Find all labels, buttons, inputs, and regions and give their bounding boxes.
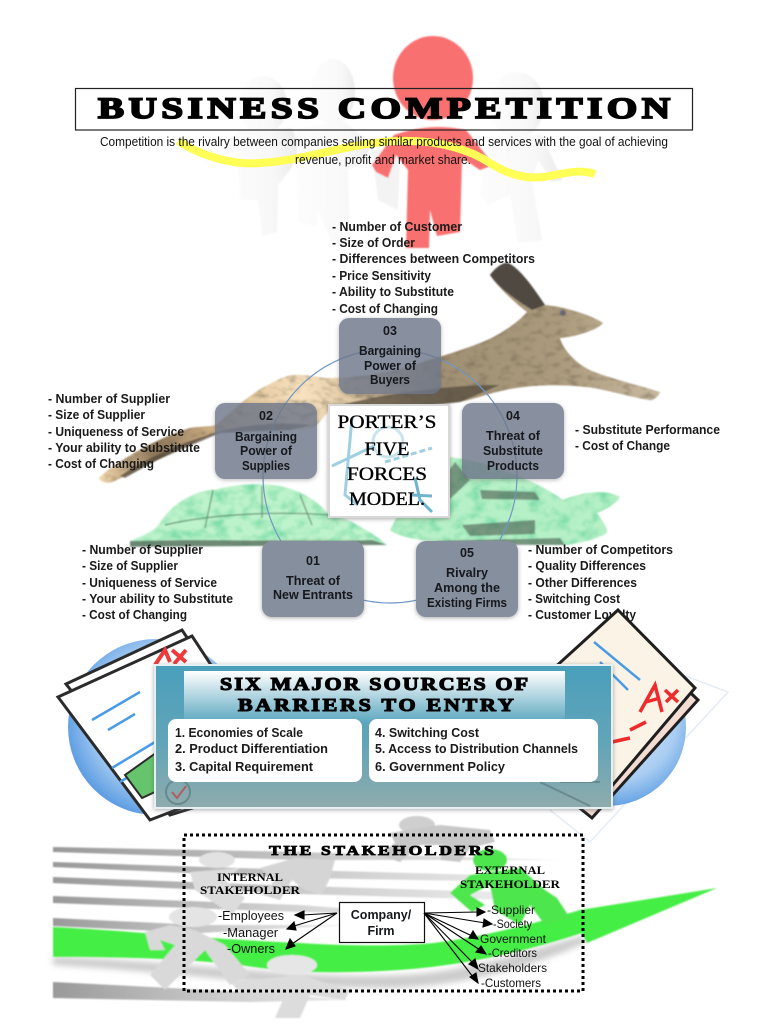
centre box faint tap icon — [332, 418, 432, 512]
list: rivalry factors: - Number of Competitors — [528, 543, 673, 557]
external heading — [460, 865, 561, 891]
internal heading — [200, 872, 301, 897]
right front paper — [552, 610, 695, 800]
company box: Company/ — [351, 908, 412, 922]
grey runners — [145, 816, 495, 1018]
external list: Government — [480, 932, 547, 946]
force 02: Supplies — [242, 459, 290, 473]
list: suppliers factors: - Number of Supplier — [48, 392, 170, 406]
panel: the stakeholders — [184, 835, 583, 991]
centre box: PORTER’S — [338, 412, 436, 433]
force 02 — [215, 403, 317, 479]
list: buyers factors: - Price Sensitivity — [332, 269, 431, 283]
intro text: revenue, profit and market share. — [295, 153, 471, 167]
force 04: 04 — [506, 409, 520, 423]
heading: BARRIERS TO ENTRY — [238, 696, 514, 715]
hare ear — [490, 263, 545, 310]
list: buyers factors: - Number of Customer — [332, 220, 462, 234]
force 02: Bargaining — [235, 430, 297, 444]
external list: Stakeholders — [478, 961, 547, 975]
internal heading: INTERNAL — [217, 872, 283, 884]
internal list: -Employees — [218, 908, 284, 923]
left card: 3. Capital Requirement — [175, 760, 314, 774]
figure: left white runner — [203, 76, 300, 236]
list: new entrants factors: - Number of Supplier — [82, 543, 203, 557]
ribbon: yellow finish line — [178, 141, 595, 177]
grey track stripes — [53, 847, 560, 1002]
force 01 — [262, 541, 364, 617]
internal list: -Owners — [227, 941, 275, 956]
list: new entrants factors: - Size of Supplier — [82, 559, 178, 573]
force 03 — [339, 318, 441, 394]
right card: 5. Access to Distribution Channels — [375, 742, 578, 756]
arrows: company to external — [424, 908, 492, 983]
centre box — [329, 405, 449, 517]
force 03: 03 — [383, 324, 397, 338]
centre box: FORCES — [347, 464, 427, 485]
internal heading: STAKEHOLDER — [200, 885, 301, 897]
figure: small runner behind — [372, 150, 400, 210]
left front paper — [58, 636, 280, 820]
list: rivalry factors — [528, 543, 673, 622]
heading band — [184, 671, 565, 723]
force 01: New Entrants — [273, 588, 353, 602]
external heading: STAKEHOLDER — [460, 879, 561, 891]
centre box: MODEL. — [349, 489, 425, 510]
list: suppliers factors: - Cost of Changing — [48, 457, 154, 471]
hare hind leg shadow — [120, 423, 312, 478]
internal list: -Manager — [223, 925, 279, 940]
force 05: Among the — [434, 581, 500, 595]
faint panel marks — [166, 780, 600, 806]
title text: BUSINESS COMPETITION — [98, 91, 670, 125]
dotted frame — [184, 835, 583, 991]
list: substitutes factors: - Cost of Change — [575, 439, 670, 453]
list: substitutes factors — [575, 423, 720, 453]
figure: red lead runner — [372, 36, 494, 248]
list: substitutes factors: - Substitute Performance — [575, 423, 720, 437]
force 05: 05 — [460, 546, 474, 560]
right card — [369, 719, 598, 782]
company box — [340, 902, 424, 942]
illustration: right turtle — [390, 457, 620, 545]
force 05: Rivalry — [446, 566, 488, 580]
illustration: running figures — [203, 36, 562, 248]
illustration: running track — [53, 816, 717, 1018]
list: suppliers factors: - Uniqueness of Service — [48, 425, 184, 439]
right paper marks — [594, 642, 640, 690]
illustration: left ball and papers — [58, 630, 282, 820]
external list: -Customers — [481, 976, 541, 990]
force 04: Substitute — [483, 444, 543, 458]
heading — [220, 675, 528, 715]
external list: -Supplier — [487, 903, 535, 917]
stakeholders heading: THE STAKEHOLDERS — [269, 844, 494, 858]
figure: second white runner — [296, 59, 372, 244]
force 05 — [416, 541, 518, 617]
list: buyers factors — [332, 220, 535, 316]
right back paper — [520, 625, 698, 818]
force 03: Buyers — [370, 373, 410, 387]
force 04: Threat of — [486, 429, 541, 443]
company box: Firm — [367, 924, 395, 938]
list: buyers factors: - Cost of Changing — [332, 302, 438, 316]
intro text — [100, 135, 668, 167]
faint diamond outline — [550, 640, 728, 842]
list: suppliers factors — [48, 392, 200, 471]
title box — [76, 88, 692, 130]
list: buyers factors: - Size of Order — [332, 236, 415, 250]
external list: -Society — [493, 917, 532, 931]
left card — [168, 719, 362, 782]
force 03: Power of — [364, 359, 417, 373]
left card: 1. Economies of Scale — [175, 726, 303, 740]
right card: 4. Switching Cost — [375, 726, 480, 740]
left back paper — [66, 630, 282, 815]
force 03: Bargaining — [359, 344, 421, 358]
external list: -Creditors — [488, 946, 537, 960]
arrow shadow — [53, 935, 585, 988]
list: rivalry factors: - Quality Differences — [528, 559, 646, 573]
list: new entrants factors: - Your ability to Substitute — [82, 592, 233, 606]
list: buyers factors: - Differences between Competitors — [332, 252, 535, 266]
right card: 6. Government Policy — [375, 760, 505, 774]
illustration: left turtle — [130, 484, 387, 547]
illustration: hare — [99, 263, 660, 483]
list: buyers factors: - Ability to Substitute — [332, 285, 454, 299]
green arrow — [53, 888, 717, 972]
heading: SIX MAJOR SOURCES OF — [220, 675, 528, 694]
force 04 — [462, 403, 564, 479]
illustration: right ball and papers — [520, 610, 728, 842]
force 05: Existing Firms — [427, 596, 507, 610]
external list — [478, 903, 547, 990]
list: rivalry factors: - Switching Cost — [528, 592, 621, 606]
list: new entrants factors: - Uniqueness of Service — [82, 576, 217, 590]
title — [76, 88, 692, 130]
figure: right white runner — [470, 72, 562, 243]
list: rivalry factors: - Customer Loyalty — [528, 608, 636, 622]
internal list — [218, 908, 284, 956]
force 01: 01 — [306, 554, 320, 568]
left card: 2. Product Differentiation — [175, 742, 328, 756]
panel: barriers to entry — [155, 665, 612, 808]
intro text: Competition is the rivalry between companies selling similar products and services with the goal of achieving — [100, 135, 668, 149]
list: new entrants factors — [82, 543, 233, 622]
force 02: Power of — [240, 444, 293, 458]
centre box: FIVE — [364, 439, 410, 460]
arrows: company to internal — [286, 911, 337, 949]
list: rivalry factors: - Other Differences — [528, 576, 637, 590]
force 04: Products — [487, 459, 539, 473]
list: suppliers factors: - Size of Supplier — [48, 408, 145, 422]
list: new entrants factors: - Cost of Changing — [82, 608, 187, 622]
hare belly shadow — [340, 385, 500, 408]
force 02: 02 — [259, 409, 273, 423]
list: suppliers factors: - Your ability to Substitute — [48, 441, 200, 455]
force 01: Threat of — [286, 574, 341, 588]
external heading: EXTERNAL — [475, 865, 545, 877]
green runner — [450, 849, 570, 925]
left paper marks — [92, 692, 160, 782]
diagram: Porter's five forces — [215, 318, 564, 617]
cycle ring — [263, 349, 517, 603]
